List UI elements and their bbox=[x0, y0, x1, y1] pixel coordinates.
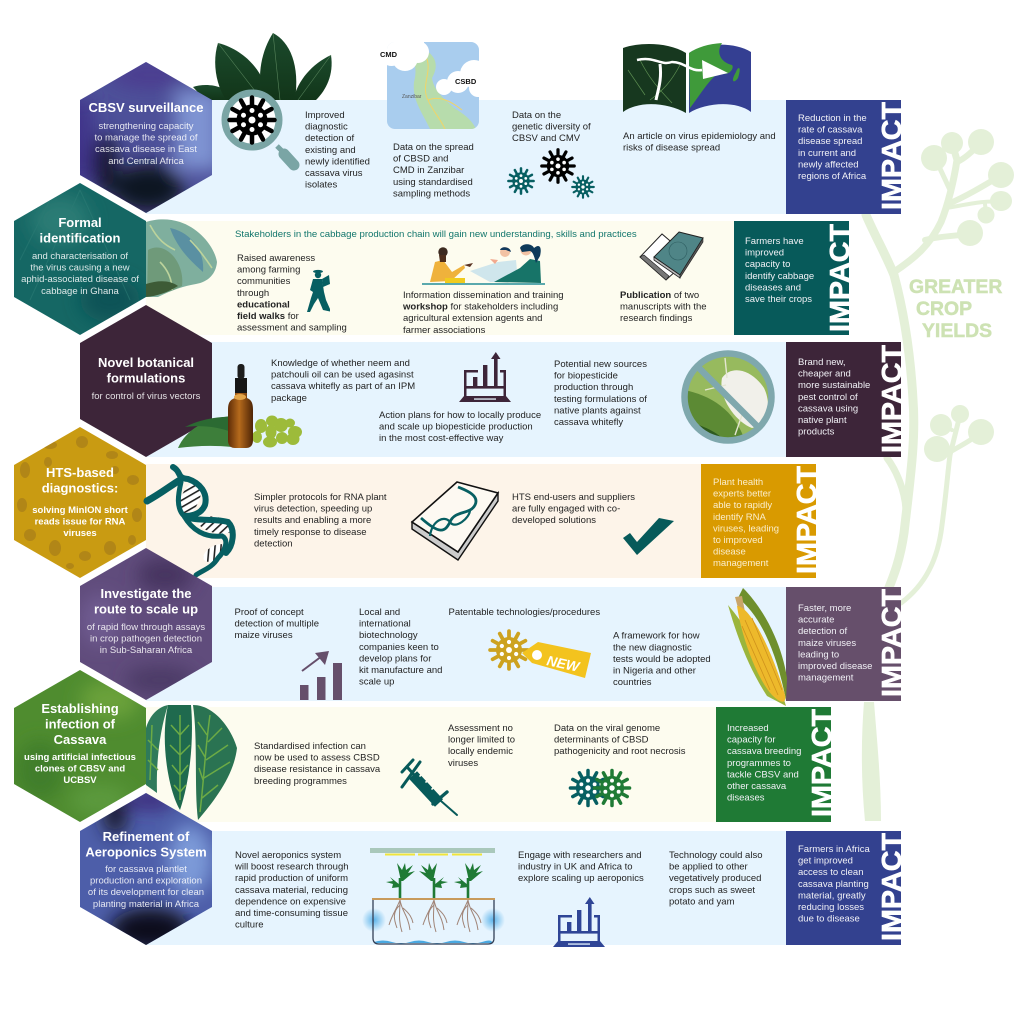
text: improved diagnostic detection: newly identified bbox=[305, 156, 370, 167]
band: row 7 background bbox=[146, 831, 786, 945]
text: neem and patchouli: Knowledge of whether neem and bbox=[271, 358, 410, 369]
impact panel: row 3: native plant bbox=[798, 415, 847, 426]
text: potential new sources: native plants against bbox=[554, 405, 641, 416]
impact panel: row 6: Increased bbox=[727, 723, 769, 734]
impact panel: row 1: disease spread bbox=[798, 136, 862, 147]
text: proof of concept: detection of multiple bbox=[234, 619, 319, 630]
text: technology applied: crops such as sweet bbox=[669, 885, 755, 896]
panel: row 3 novel botanical formulations bbox=[80, 305, 907, 457]
icon: two manuscripts bbox=[640, 232, 703, 280]
impact panel: row 5: maize viruses bbox=[798, 638, 856, 649]
impact panel: row 4: IMPACT bbox=[791, 466, 822, 574]
text: workshop: for stakeholders including bbox=[448, 302, 558, 313]
text: raised awareness: communities bbox=[237, 276, 291, 287]
text: engage with researchers: explore scaling up aeroponics bbox=[518, 873, 644, 884]
hexagon: HTS-based diagnostics: diagnostics: bbox=[42, 480, 118, 496]
text: assessment no longer limited: longer limited to bbox=[448, 735, 515, 746]
impact panel: row 5: leading to bbox=[798, 649, 839, 660]
hexagon: investigate the route: in crop pathogen detection bbox=[90, 634, 202, 645]
hexagon: establishing infection of cassava: using artificial infectious bbox=[24, 752, 136, 763]
text: raised awareness: through bbox=[237, 288, 269, 299]
text: workshop: workshop bbox=[402, 302, 448, 313]
impact panel: row 7: reducing losses bbox=[798, 902, 864, 913]
text: publication: of two bbox=[671, 290, 699, 301]
icon: check mark bbox=[623, 518, 674, 555]
text: framework: tests would be adopted bbox=[613, 654, 711, 665]
impact panel: row 3: Brand new, bbox=[798, 357, 846, 368]
impact panel: row 6: diseases bbox=[727, 793, 765, 804]
impact panel: row 7: access to clean bbox=[798, 867, 863, 878]
band: row 4 background bbox=[146, 464, 701, 578]
impact panel: row 4: identify RNA bbox=[713, 512, 766, 523]
impact panel: row 6: cassava breeding bbox=[727, 746, 801, 757]
hexagon: establishing infection of cassava: Establishing bbox=[41, 701, 119, 716]
icon: three viruses bbox=[508, 150, 594, 198]
text: end-users and suppliers: HTS end-users and suppliers bbox=[512, 492, 635, 503]
heading: stakeholders: Stakeholders in the cabbage production chain will gain new understanding, skills and practices bbox=[235, 229, 637, 240]
hexagon: CBSV surveillance: strengthening capacity bbox=[98, 121, 194, 132]
impact panel: row 6: capacity for bbox=[727, 735, 776, 746]
impact panel: row 3 bbox=[786, 342, 907, 457]
text: patentable technologies: Patentable technologies/procedures bbox=[448, 607, 600, 618]
text: technology applied: vegetatively produced bbox=[669, 873, 761, 884]
impact panel: row 6: tackle CBSV and bbox=[727, 769, 799, 780]
icon: laptop with rising bars bbox=[459, 352, 511, 402]
text: publication: research findings bbox=[620, 313, 693, 324]
impact panel: row 5: Faster, more bbox=[798, 603, 851, 614]
text: proof of concept: maize viruses bbox=[234, 630, 293, 641]
text: improved diagnostic detection: diagnostic bbox=[305, 122, 348, 133]
panel: row 7 refinement of aeroponics bbox=[80, 787, 907, 952]
hexagon: refinement of aeroponics system: of its development for clean bbox=[88, 887, 204, 898]
text: simpler protocols: results and enabling a more bbox=[254, 515, 371, 526]
hexagon: formal identification bbox=[14, 183, 146, 335]
text: raised awareness: educational bbox=[237, 299, 290, 310]
panel: row 2 formal identification bbox=[14, 183, 855, 336]
hexagon: novel botanical formulations: for control of virus vectors bbox=[92, 391, 201, 402]
impact panel: row 3: IMPACT bbox=[876, 345, 907, 453]
text: simpler protocols: virus detection, speeding up bbox=[254, 504, 372, 515]
hexagon: establishing infection of cassava bbox=[14, 670, 146, 822]
hexagon: HTS-based diagnostics: solving MinION short bbox=[32, 505, 129, 516]
impact panel: row 3: cheaper and bbox=[798, 369, 851, 380]
impact panel: row 5: improved disease bbox=[798, 661, 872, 672]
impact panel: row 7: Farmers in Africa bbox=[798, 844, 871, 855]
impact panel: row 4: viruses, leading bbox=[713, 523, 779, 534]
impact panel: row 7: cassava planting bbox=[798, 879, 869, 890]
text: novel aeroponics system: Novel aeroponics system bbox=[235, 850, 341, 861]
text: data on spread: of CBSD and bbox=[393, 154, 448, 165]
text: potential new sources: for biopesticide bbox=[554, 371, 618, 382]
band: row 5 background bbox=[146, 587, 786, 701]
text: neem and patchouli: cassava whitefly as part of an IPM bbox=[271, 381, 415, 392]
hexagon: refinement of aeroponics system: production and exploration bbox=[90, 876, 202, 887]
hexagon: refinement of aeroponics system: Refinement of bbox=[103, 829, 190, 844]
icon: magnifier with virus bbox=[225, 93, 294, 165]
icon: cassava leaves bbox=[193, 33, 332, 100]
text: genetic diversity: Data on the bbox=[512, 110, 561, 121]
hexagon: investigate the route: Investigate the bbox=[100, 586, 192, 601]
text: potential new sources: cassava whitefly bbox=[554, 417, 623, 428]
impact panel: row 7 bbox=[786, 831, 907, 945]
text: novel aeroponics system: culture bbox=[235, 920, 264, 931]
impact panel: row 1: in current and bbox=[798, 148, 856, 159]
icon: workshop people bbox=[422, 244, 545, 285]
text: potential new sources: testing formulations of bbox=[554, 394, 647, 405]
plant caption: greater crop yields bbox=[909, 276, 1002, 342]
text: viral genome determinants: pathogenicity and root necrosis bbox=[554, 746, 686, 757]
text: action plans: in the most cost-effective way bbox=[379, 433, 504, 444]
text: data on spread: CMD in Zanzibar bbox=[393, 165, 464, 176]
hexagon: formal identification: identification bbox=[40, 230, 121, 246]
text: assessment no longer limited: locally endemic bbox=[448, 746, 513, 757]
impact panel: row 2: capacity to bbox=[745, 259, 790, 270]
impact panel: row 6 bbox=[716, 707, 837, 822]
hexagon: novel botanical formulations bbox=[80, 305, 212, 457]
impact panel: row 2: Farmers have bbox=[745, 236, 804, 247]
impact panel: row 2: improved bbox=[745, 248, 784, 259]
impact panel: row 7: IMPACT bbox=[876, 833, 907, 941]
text: raised awareness: assessment and sampling bbox=[237, 323, 347, 334]
hexagon: investigate the route: of rapid flow through assays bbox=[87, 622, 205, 633]
hexagon: refinement of aeroponics system: for cassava plantlet bbox=[105, 864, 187, 875]
hexagon: HTS-based diagnostics bbox=[14, 427, 146, 578]
text: simpler protocols: timely response to disease bbox=[254, 527, 366, 538]
impact panel: row 4: management bbox=[713, 558, 769, 569]
impact panel: row 3: pest control of bbox=[798, 392, 858, 403]
map: Zanzibar with disease clouds: CMD bbox=[380, 50, 398, 59]
impact panel: row 7: get improved bbox=[798, 856, 853, 867]
impact panel: row 5: accurate bbox=[798, 615, 834, 626]
impact panel: row 2 bbox=[734, 221, 855, 335]
hexagon: formal identification: cabbage in Ghana bbox=[41, 286, 120, 297]
text: framework: countries bbox=[613, 677, 652, 688]
panel: row 1 CBSV surveillance bbox=[60, 33, 907, 214]
icon: no whitefly sign bbox=[684, 353, 772, 441]
text: local and international: kit manufacture and bbox=[359, 665, 442, 676]
text: data on spread: using standardised bbox=[393, 177, 473, 188]
text: viral genome determinants: Data on the viral genome bbox=[554, 723, 660, 734]
map: Zanzibar with disease clouds: CSBD bbox=[455, 77, 477, 86]
icon: book with DNA bbox=[412, 482, 498, 560]
hexagon: novel botanical formulations: formulations bbox=[107, 370, 185, 386]
text: improved diagnostic detection: cassava virus bbox=[305, 168, 363, 179]
hexagon: formal identification: the virus causing a new bbox=[30, 263, 130, 274]
text: local and international: Local and bbox=[359, 607, 400, 618]
icon: laptop with rising bars, blue bbox=[553, 897, 605, 947]
text: data on spread: sampling methods bbox=[393, 188, 470, 199]
impact panel: row 3: products bbox=[798, 427, 835, 438]
impact panel: row 3: cassava using bbox=[798, 403, 858, 414]
text: publication: manuscripts with the bbox=[620, 302, 707, 313]
map: Zanzibar with disease clouds bbox=[380, 42, 479, 129]
text: standardised infection: disease resistance in cassava bbox=[254, 764, 381, 775]
impact panel: row 2: IMPACT bbox=[824, 224, 855, 332]
icon: maize cob bbox=[728, 588, 787, 706]
text: novel aeroponics system: rapid production of uniform bbox=[235, 873, 348, 884]
hexagon: establishing infection of cassava: Cassava bbox=[54, 732, 107, 747]
impact panel: row 4: able to rapidly bbox=[713, 500, 772, 511]
text: engage with researchers: Engage with researchers and bbox=[518, 850, 642, 861]
impact panel: row 4 bbox=[701, 464, 822, 578]
impact panel: row 5 bbox=[786, 587, 907, 701]
text: improved diagnostic detection: existing and bbox=[305, 145, 356, 156]
impact panel: row 4: to improved bbox=[713, 535, 763, 546]
icon: virus with NEW tag bbox=[490, 631, 591, 678]
plant illustration: background stems bbox=[862, 129, 1014, 821]
map: Zanzibar with disease clouds: Zanzibar bbox=[402, 94, 422, 100]
text: standardised infection: Standardised infection can bbox=[254, 741, 366, 752]
text: workshop: Information dissemination and training bbox=[403, 290, 564, 301]
text: novel aeroponics system: will boost research through bbox=[234, 862, 349, 873]
hexagon: HTS-based diagnostics: HTS-based bbox=[46, 465, 114, 480]
text: raised awareness: for bbox=[285, 311, 299, 322]
icon: two viruses bbox=[570, 770, 630, 806]
band: row 1 background bbox=[146, 100, 786, 214]
icon: syringe bbox=[402, 760, 457, 815]
text: improved diagnostic detection: isolates bbox=[305, 180, 337, 191]
icon: cabbage photo bbox=[146, 219, 217, 297]
hexagon: investigate the route: route to scale up bbox=[94, 602, 198, 616]
icon: oil bottle, leaves and berries bbox=[178, 364, 302, 448]
impact panel: row 3: more sustainable bbox=[798, 380, 870, 391]
hexagon: formal identification: and characterisation of bbox=[32, 251, 128, 262]
hexagon: CBSV surveillance: and Central Africa bbox=[108, 156, 184, 167]
icon: open book with leaf and map bbox=[623, 43, 751, 113]
text: technology applied: be applied to other bbox=[669, 862, 748, 873]
icon: virus with NEW tag: NEW bbox=[545, 652, 582, 675]
text: engage with researchers: industry in UK and Africa to bbox=[518, 862, 633, 873]
text: workshop: agricultural extension agents and bbox=[403, 313, 542, 324]
impact panel: row 2: diseases and bbox=[745, 282, 801, 293]
hexagon: refinement of aeroponics system bbox=[80, 787, 212, 952]
text: improved diagnostic detection: detection of bbox=[305, 133, 354, 144]
plant caption: greater crop yields: YIELDS bbox=[922, 320, 992, 342]
impact panel: row 2: save their crops bbox=[745, 294, 812, 305]
icon: aeroponics tank with plants bbox=[362, 848, 505, 944]
impact panel: row 5: management bbox=[798, 673, 854, 684]
text: potential new sources: production through bbox=[554, 382, 633, 393]
impact panel: row 5: detection of bbox=[798, 626, 847, 637]
text: genetic diversity: CBSV and CMV bbox=[512, 133, 581, 144]
hexagon: investigate the route: in Sub-Saharan Africa bbox=[100, 645, 193, 656]
impact panel: row 1: Reduction in the bbox=[798, 113, 867, 124]
icon: walker with notebook bbox=[307, 270, 330, 312]
text: local and international: international bbox=[359, 619, 411, 630]
impact panel: row 7: due to disease bbox=[798, 914, 860, 925]
text: local and international: develop plans for bbox=[359, 653, 431, 664]
band: row 3 background bbox=[146, 342, 786, 457]
text: article on epidemiology: An article on virus epidemiology and bbox=[623, 131, 776, 142]
text: raised awareness: among farming bbox=[237, 265, 300, 276]
hexagon: HTS-based diagnostics: reads issue for RNA bbox=[35, 517, 126, 528]
panel: row 5 route to scale up bbox=[80, 548, 907, 706]
hexagon: HTS-based diagnostics: viruses bbox=[63, 528, 97, 539]
text: potential new sources: Potential new sources bbox=[554, 359, 647, 370]
text: standardised infection: breeding programmes bbox=[254, 776, 347, 787]
hexagon: CBSV surveillance: to manage the spread of bbox=[94, 133, 198, 144]
hexagon: CBSV surveillance: CBSV surveillance bbox=[89, 100, 203, 115]
plant caption: greater crop yields: GREATER bbox=[909, 276, 1002, 298]
hexagon: novel botanical formulations: Novel botanical bbox=[98, 355, 194, 370]
text: proof of concept: Proof of concept bbox=[234, 607, 304, 618]
impact panel: row 5: IMPACT bbox=[876, 589, 907, 697]
text: data on spread: Data on the spread bbox=[393, 142, 474, 153]
text: action plans: and scale up biopesticide production bbox=[379, 422, 533, 433]
text: simpler protocols: detection bbox=[254, 538, 293, 549]
text: genetic diversity: genetic diversity of bbox=[512, 122, 591, 133]
band: row 6 background bbox=[146, 707, 716, 822]
text: technology applied: Technology could also bbox=[669, 850, 762, 861]
impact panel: row 6: IMPACT bbox=[806, 709, 837, 817]
text: action plans: Action plans for how to locally produce bbox=[379, 410, 541, 421]
impact panel: row 4: experts better bbox=[713, 489, 771, 500]
impact panel: row 6: programmes to bbox=[727, 758, 791, 769]
text: viral genome determinants: determinants of CBSD bbox=[554, 735, 649, 746]
text: framework: in Nigeria and other bbox=[613, 666, 696, 676]
text: novel aeroponics system: cassava material, reducing bbox=[235, 885, 348, 896]
text: neem and patchouli: package bbox=[271, 393, 307, 404]
text: framework: the new diagnostic bbox=[613, 642, 692, 653]
hexagon: refinement of aeroponics system: planting material in Africa bbox=[93, 899, 200, 910]
hexagon: formal identification: aphid-associated disease of bbox=[21, 274, 139, 285]
impact panel: row 6: other cassava bbox=[727, 781, 787, 792]
text: raised awareness: field walks bbox=[237, 311, 285, 322]
hexagon: establishing infection of cassava: clones of CBSV and bbox=[35, 764, 125, 775]
text: workshop: farmer associations bbox=[403, 325, 486, 336]
text: improved diagnostic detection: Improved bbox=[305, 110, 345, 121]
hexagon: establishing infection of cassava: infection of bbox=[45, 716, 116, 732]
impact panel: row 1: IMPACT bbox=[876, 102, 907, 210]
text: framework: A framework for how bbox=[613, 631, 700, 642]
text: article on epidemiology: risks of disease spread bbox=[623, 143, 720, 154]
impact panel: row 4: Plant health bbox=[713, 477, 763, 488]
text: novel aeroponics system: and time-consuming tissue bbox=[235, 908, 348, 919]
text: neem and patchouli: patchouli oil can be used agasinst bbox=[271, 370, 414, 381]
text: end-users and suppliers: are fully engaged with co- bbox=[512, 504, 620, 515]
plant caption: greater crop yields: CROP bbox=[916, 298, 972, 320]
impact panel: row 4: disease bbox=[713, 547, 746, 558]
hexagon: CBSV surveillance: cassava disease in East bbox=[95, 144, 197, 155]
hexagon: refinement of aeroponics system: Aeroponics System bbox=[85, 844, 207, 860]
impact panel: row 1 bbox=[786, 100, 907, 214]
text: end-users and suppliers: developed solutions bbox=[512, 515, 596, 526]
text: assessment no longer limited: viruses bbox=[448, 758, 478, 769]
impact panel: row 1: regions of Africa bbox=[798, 171, 867, 182]
text: local and international: companies keen to bbox=[359, 642, 439, 653]
text: local and international: biotechnology bbox=[359, 630, 418, 641]
icon: rising bar chart bbox=[300, 651, 342, 700]
text: simpler protocols: Simpler protocols for RNA plant bbox=[254, 492, 387, 503]
band: row 2 background bbox=[146, 221, 734, 335]
text: standardised infection: now be used to assess CBSD bbox=[254, 753, 380, 764]
text: publication: Publication bbox=[620, 290, 671, 301]
icon: cassava leaf photo bbox=[146, 705, 237, 820]
panel: row 6 establishing infection bbox=[14, 670, 837, 822]
impact panel: row 2: identify cabbage bbox=[745, 271, 814, 282]
text: technology applied: potato and yam bbox=[669, 896, 735, 907]
text: assessment no longer limited: Assessment no bbox=[448, 723, 513, 734]
icon: DNA helix bbox=[147, 467, 235, 575]
hexagon: establishing infection of cassava: UCBSV bbox=[63, 775, 97, 786]
text: novel aeroponics system: dependence on expensive bbox=[235, 896, 346, 907]
text: local and international: scale up bbox=[359, 677, 394, 688]
hexagon: CBSV surveillance bbox=[80, 62, 212, 213]
impact panel: row 7: material, greatly bbox=[798, 890, 866, 901]
impact panel: row 1: rate of cassava bbox=[798, 125, 863, 136]
panel: row 4 HTS-based diagnostics bbox=[14, 427, 822, 578]
hexagon: investigate the route bbox=[80, 548, 212, 700]
hexagon: formal identification: Formal bbox=[58, 215, 102, 230]
text: raised awareness: Raised awareness bbox=[237, 253, 315, 264]
impact panel: row 1: newly affected bbox=[798, 159, 859, 170]
